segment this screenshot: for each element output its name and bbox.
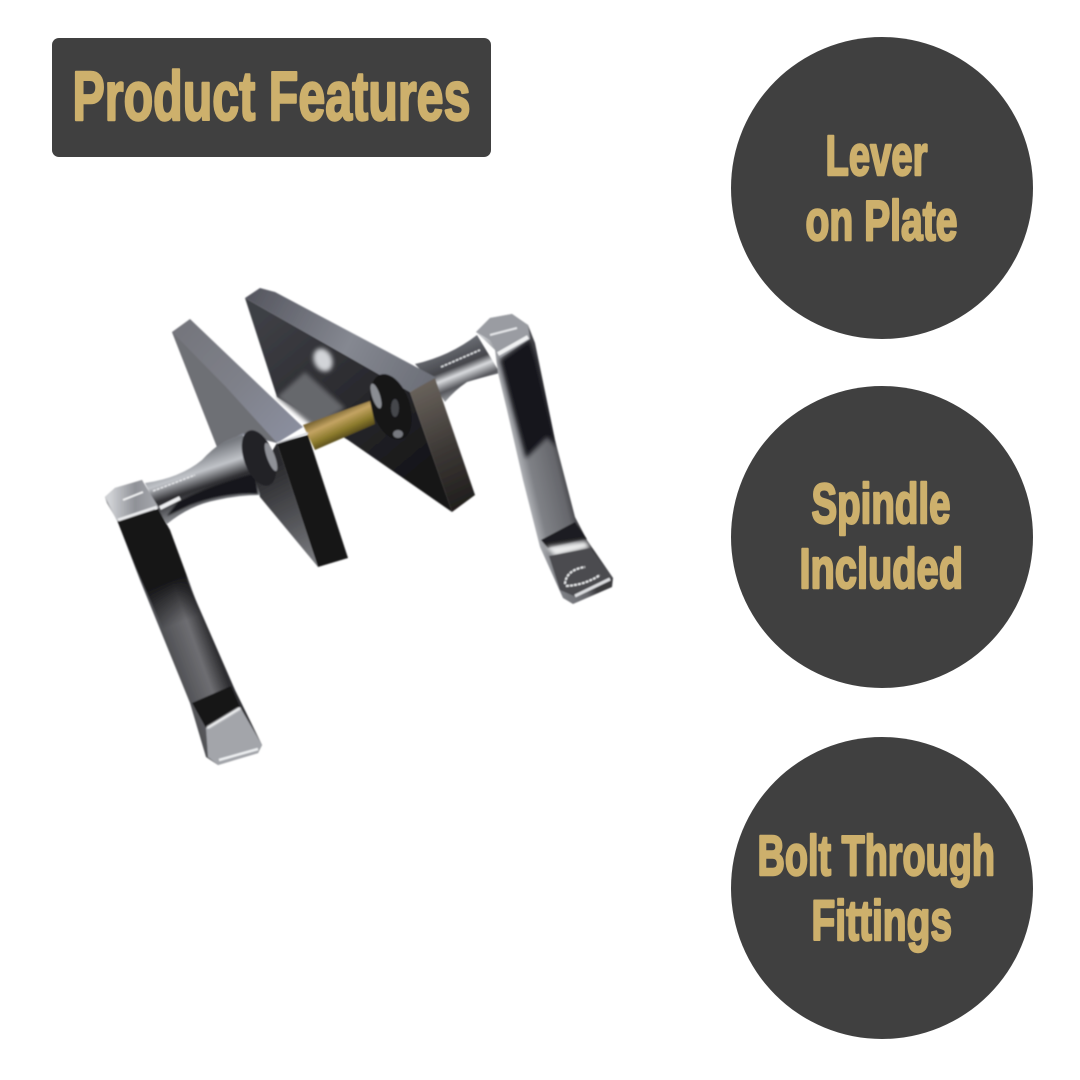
left handle neck	[145, 435, 260, 524]
spindle nut	[362, 369, 420, 445]
back plate	[245, 288, 475, 512]
badge text: spindle included: Spindle	[812, 472, 950, 536]
right handle neck	[415, 335, 500, 402]
title text: Product Features	[72, 57, 470, 135]
collar ring	[235, 426, 283, 490]
badge text: spindle included: Included	[800, 537, 963, 601]
badge text: bolt through fittings: Fittings	[812, 889, 952, 953]
circle badge: bolt through fittings	[731, 737, 1033, 1039]
badge text: lever on plate: on Plate	[806, 189, 958, 253]
right lever	[476, 314, 613, 604]
badge text: lever on plate	[806, 124, 958, 253]
badge text: spindle included	[800, 472, 963, 601]
product image: chrome lever handles on plates	[105, 288, 613, 765]
title banner	[52, 38, 491, 157]
circle badge: lever on plate	[731, 37, 1033, 339]
badge text: lever on plate: Lever	[826, 124, 928, 188]
left lever	[105, 480, 262, 765]
circle badge: spindle included	[731, 386, 1033, 688]
badge text: bolt through fittings	[758, 824, 995, 953]
brass spindle	[303, 401, 375, 450]
front plate	[172, 319, 348, 567]
